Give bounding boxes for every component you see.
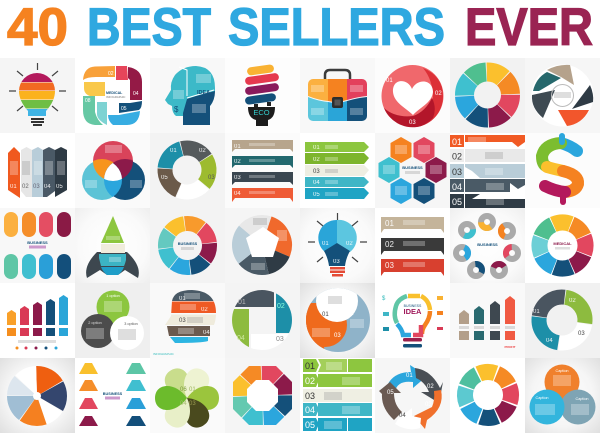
eco bulb pills: ECO (253, 108, 270, 117)
circle with square hole: 03 (276, 336, 284, 343)
striped head: 03 (179, 318, 186, 324)
arrow ring five: 05 (387, 390, 394, 396)
medical octagon ring (533, 216, 592, 275)
venn three captions: Caption (555, 369, 569, 373)
arrow ring five: 04 (399, 413, 406, 419)
venn three captions: Caption (535, 396, 549, 400)
part table: 05 (452, 197, 462, 207)
rounded square medical: MEDICAL (106, 91, 123, 95)
part table: 01 (452, 137, 462, 147)
yin yang three (306, 288, 370, 352)
venn three titles (81, 141, 146, 201)
rocket (86, 216, 139, 278)
venn three options: 2 option (88, 321, 102, 325)
briefcase (308, 70, 367, 121)
hexagons: BUSINESS (402, 165, 423, 170)
arrow rows stack: 05 (313, 192, 320, 198)
arrow rows stack (305, 142, 369, 199)
striped head: 02 (201, 307, 208, 313)
arrow ring five: 03 (425, 402, 432, 408)
light bulb idea: 02 (346, 241, 353, 247)
part rows table: 02 (305, 376, 315, 386)
option ribbons three: 01 (385, 219, 394, 228)
rounded square medical: 04 (133, 91, 139, 97)
yin yang three: 02 (347, 311, 354, 317)
arrow columns (8, 147, 67, 198)
light bulb idea: 03 (333, 259, 340, 265)
arrow rows stack: 02 (313, 157, 320, 163)
ring five parts: 05 (161, 175, 168, 181)
hexagons (378, 137, 446, 204)
ring five parts: 03 (208, 175, 215, 181)
venn three options: 3 option (124, 322, 138, 326)
rainbow bulb idea: IDEA (404, 307, 422, 316)
ring five parts: 02 (199, 148, 206, 154)
ring five parts: 01 (170, 148, 177, 154)
ring four parts: 01 (533, 309, 540, 315)
rainbow bulb idea: BUSINESS (404, 304, 422, 308)
rainbow bulb idea (382, 296, 443, 348)
bar arrows four (459, 296, 516, 349)
option ribbons: 02 (234, 159, 241, 165)
yin yang three: 03 (334, 333, 341, 339)
dollar sign puzzle (542, 136, 578, 202)
trapezoid labels: BUSINESS (103, 392, 123, 396)
arrow columns: 04 (44, 184, 51, 190)
venn three options (81, 290, 144, 350)
circle with square hole: 01 (238, 299, 246, 306)
green clover: 01 (189, 387, 196, 393)
arrow columns: 05 (56, 184, 63, 190)
bulb stripes (9, 63, 66, 126)
green clover: 04 (180, 401, 187, 407)
option ribbons three: 02 (385, 240, 394, 249)
ring four parts: 03 (578, 331, 585, 337)
six-part pinwheel circle (532, 64, 594, 126)
rainbow bulb idea: $ (382, 296, 386, 302)
yin yang three: 01 (322, 312, 329, 318)
venn three captions (530, 364, 596, 424)
part rows table: 04 (305, 405, 315, 415)
striped head: 04 (203, 330, 210, 336)
heart ring: 03 (409, 120, 416, 126)
light bulb idea: 01 (322, 241, 329, 247)
part table (450, 135, 525, 208)
head puzzle: $ (174, 105, 179, 114)
arrow ring five (379, 365, 443, 429)
striped head: INFOGRAPHIC (153, 352, 175, 356)
arrow ring five: 01 (406, 373, 413, 379)
venn three options: 1 option (106, 294, 120, 298)
part table: 02 (452, 152, 462, 162)
option ribbons: 03 (234, 175, 241, 181)
eight panel ring (458, 365, 518, 425)
circle of small tri-circles: BUSINESS (477, 242, 498, 247)
bar arrows four: PROFIT (504, 345, 516, 349)
heart ring (382, 65, 444, 127)
green clover (155, 364, 219, 432)
option ribbons (232, 140, 293, 202)
striped head: 01 (179, 296, 186, 302)
arrow columns: 02 (22, 184, 29, 190)
option ribbons three (381, 217, 444, 276)
swirl five with pentagon (243, 218, 287, 270)
bar arrows five (7, 295, 68, 350)
light bulb idea (308, 213, 367, 276)
venn three captions: Caption (575, 397, 589, 401)
rounded square medical: 08 (85, 98, 91, 104)
rounded square medical: 05 (121, 106, 127, 112)
pie seven (22, 381, 52, 411)
arrow ring five: 02 (427, 384, 434, 390)
rounded square medical: 02 (108, 71, 114, 77)
medical octagon ring: MEDICAL (553, 241, 572, 246)
green clover: 06 (180, 387, 187, 393)
ring five parts (157, 140, 217, 200)
part rows table: 03 (305, 391, 315, 401)
rounded square medical: INFOGRAPHIC (106, 95, 125, 99)
ring five parts: 04 (183, 193, 190, 199)
arrow rows stack: 01 (313, 145, 320, 151)
arrow rows stack: 03 (313, 169, 320, 175)
octagon lens (242, 376, 282, 416)
part rows table: 05 (305, 420, 315, 430)
striped head (153, 290, 220, 356)
option ribbons three: 03 (385, 261, 394, 270)
puzzle ring eight (164, 222, 211, 269)
heart ring: 02 (435, 91, 442, 97)
puzzle ring eight: BUSINESS (178, 242, 198, 246)
eco bulb pills (245, 64, 279, 126)
part rows table (303, 359, 372, 431)
circle with square hole: 04 (237, 335, 245, 342)
green clover: 03 (189, 401, 196, 407)
circle with square hole: 02 (277, 303, 285, 310)
part table: 04 (452, 182, 462, 192)
circle with square hole (232, 290, 292, 350)
trapezoid labels (79, 363, 146, 426)
pills grid (4, 212, 71, 279)
ring four parts: 02 (569, 298, 576, 304)
ring four parts: 04 (546, 338, 553, 344)
arrow columns: 01 (10, 184, 17, 190)
rounded square medical (83, 66, 142, 125)
ring four parts (533, 293, 589, 347)
option ribbons: 04 (234, 191, 241, 197)
head puzzle (165, 66, 215, 125)
option ribbons: 01 (234, 144, 241, 150)
pills grid: BUSINESS (27, 240, 48, 245)
circle of small tri-circles (454, 214, 520, 278)
arrow rows stack: 04 (313, 180, 320, 186)
title (7, 0, 593, 57)
part table: 03 (452, 167, 462, 177)
arrow columns: 03 (33, 184, 40, 190)
heart ring: 01 (386, 78, 393, 84)
8-part flower ring (464, 72, 510, 118)
part rows table: 01 (305, 361, 315, 371)
head puzzle: IDEA (197, 90, 210, 96)
